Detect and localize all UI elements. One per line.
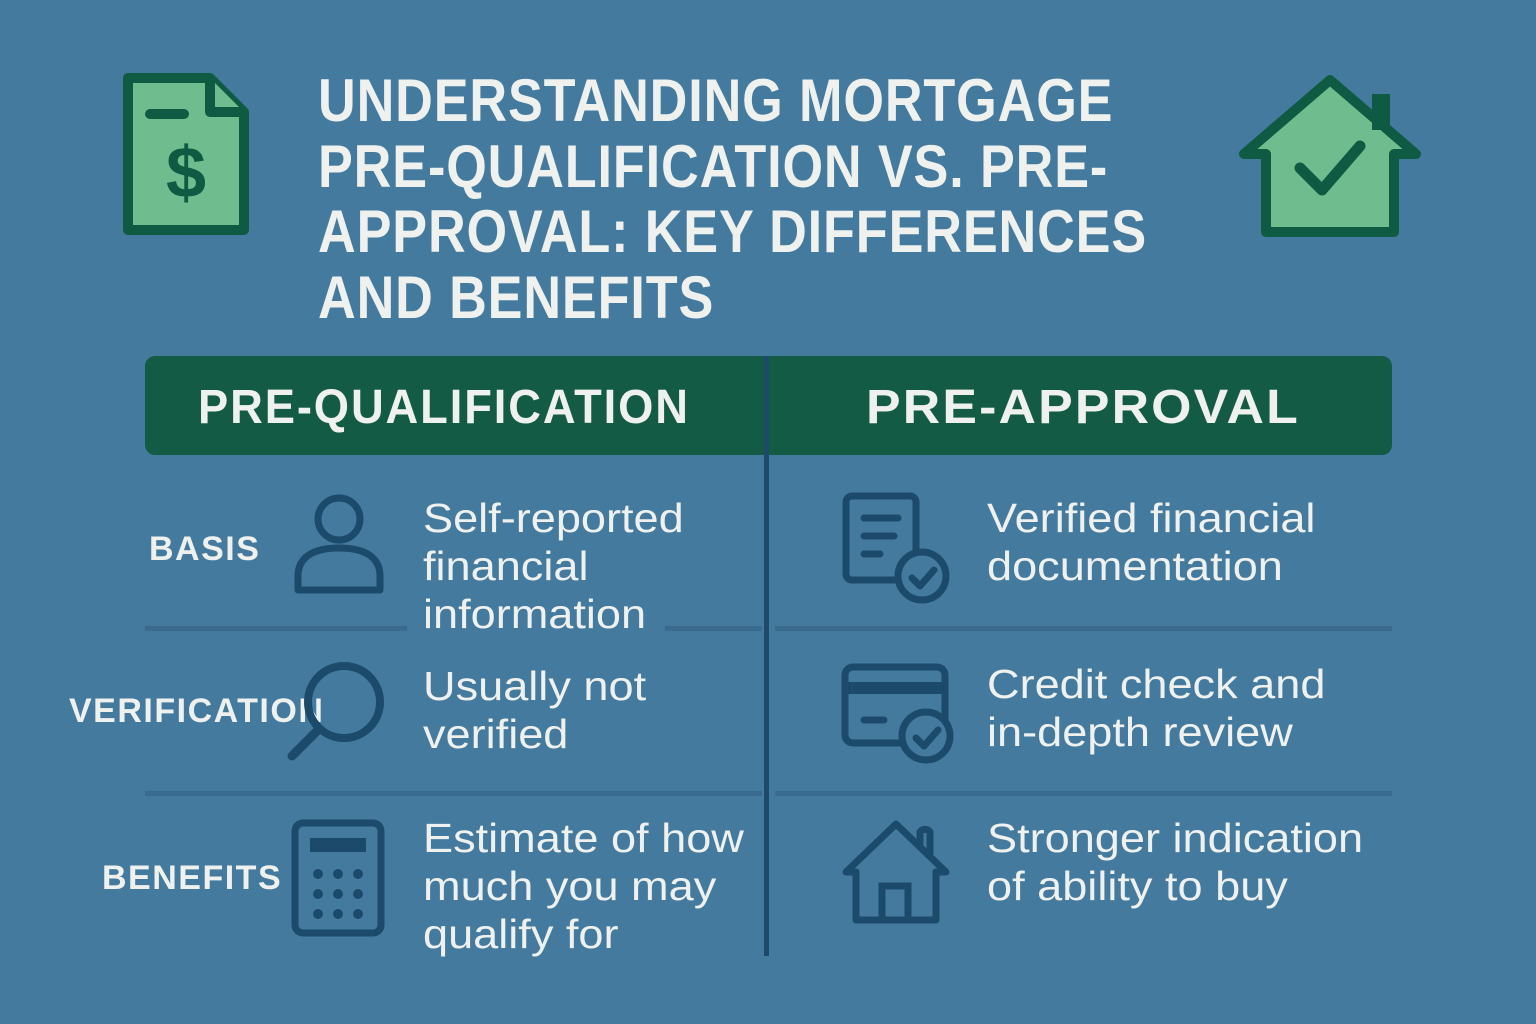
- text: usually not verified: verified: [423, 711, 568, 757]
- icon: house with check: [1239, 75, 1421, 237]
- text: verified documentation: documentation: [987, 543, 1283, 589]
- text: self-reported: Self-reported: [423, 495, 684, 541]
- title: [318, 67, 1147, 330]
- title: UNDERSTANDING MORTGAGE: [318, 67, 1113, 134]
- text: verified documentation: [987, 495, 1315, 589]
- icon: magnifier: [288, 662, 384, 760]
- text: self-reported: financial: [423, 543, 588, 589]
- text: credit check: Credit check and: [987, 661, 1325, 707]
- text: estimate: much you may: [423, 863, 716, 909]
- text: usually not verified: Usually not: [423, 663, 646, 709]
- text: estimate: [423, 815, 744, 957]
- icon: dollar document: [123, 73, 249, 235]
- text: usually not verified: [423, 663, 646, 757]
- icon: person: [294, 494, 384, 594]
- icon: dollar document: $: [166, 133, 206, 213]
- text: estimate: Estimate of how: [423, 815, 744, 861]
- title: PRE-QUALIFICATION VS. PRE-: [318, 132, 1108, 200]
- header bar: [145, 356, 1392, 455]
- text: self-reported: [423, 495, 684, 637]
- icon: house: [842, 820, 950, 924]
- header: pre-approval: PRE-APPROVAL: [866, 381, 1300, 434]
- text: stronger indication: Stronger indication: [987, 815, 1363, 861]
- label: basis: BASIS: [149, 530, 260, 568]
- text: credit check: [987, 661, 1325, 755]
- icon: calculator: [292, 820, 384, 936]
- label: benefits: BENEFITS: [102, 859, 282, 897]
- text: credit check: in-depth review: [987, 709, 1293, 755]
- title: APPROVAL: KEY DIFFERENCES: [318, 198, 1147, 265]
- text: verified documentation: Verified financial: [987, 495, 1315, 541]
- text: stronger indication: [987, 815, 1363, 909]
- title: AND BENEFITS: [318, 264, 714, 330]
- header: pre-qualification: PRE-QUALIFICATION: [198, 381, 690, 434]
- icon: document check: [842, 492, 950, 604]
- label: verification: VERIFICATION: [69, 692, 324, 730]
- icon: card check: [842, 664, 954, 764]
- text: stronger indication: of ability to buy: [987, 863, 1288, 909]
- text: self-reported: information: [423, 591, 646, 637]
- text: estimate: qualify for: [423, 911, 619, 957]
